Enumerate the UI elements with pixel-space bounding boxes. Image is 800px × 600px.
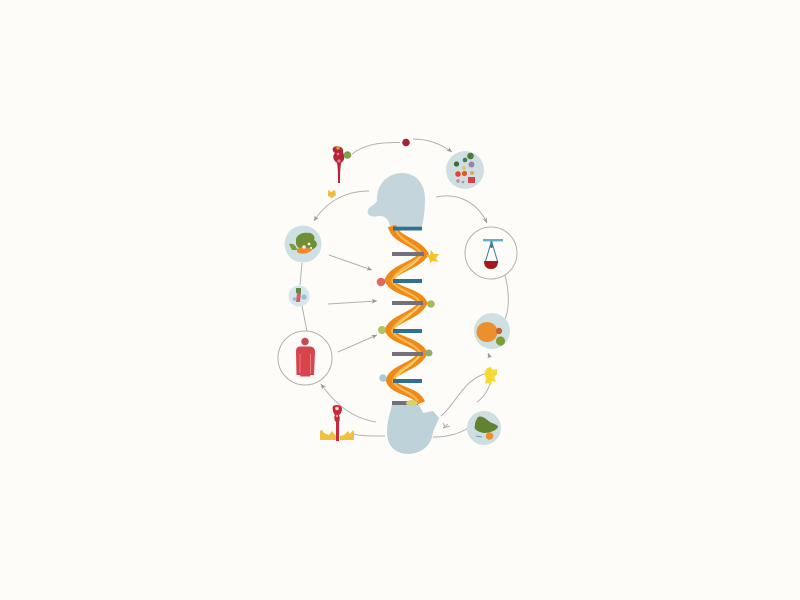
icon: person circle: [278, 331, 332, 385]
DNA helix: [389, 226, 424, 403]
icon: greens circle: [467, 411, 501, 445]
molecule: green right: [426, 350, 432, 356]
icon: yellow cat: [328, 190, 336, 198]
connecting arrows: [300, 139, 508, 437]
DNA rungs: [392, 226, 424, 405]
icon: mixed foods circle: [446, 151, 484, 189]
icon: red dot top: [402, 139, 410, 146]
molecule: red dot: [377, 278, 385, 286]
molecule: green: [427, 300, 435, 308]
molecule: yellow at base: [406, 400, 418, 406]
icon: red key with yellow base: [320, 405, 354, 441]
head shape: [368, 173, 425, 226]
icon: scale circle: [465, 227, 517, 279]
icon: red figure with leaf: [333, 146, 351, 183]
molecule: green left: [378, 326, 386, 334]
molecule: yellow star: [426, 250, 439, 263]
icon: salad circle: [284, 226, 322, 262]
icon: yellow splash: [484, 367, 497, 385]
icon: small food circle: [288, 286, 310, 306]
bottom head shape: [387, 405, 439, 454]
molecule: blue: [379, 374, 387, 382]
icon: pumpkin circle: [474, 313, 510, 349]
